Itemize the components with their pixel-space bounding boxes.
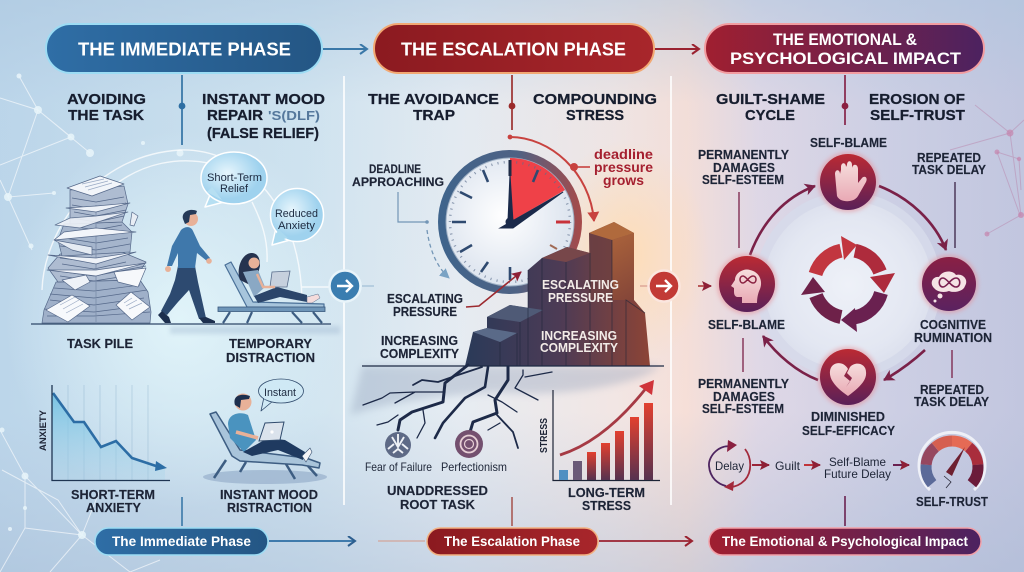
- label: cognitive rumination: [914, 318, 992, 345]
- divider: column three: [842, 75, 848, 125]
- label: unaddressed root task: ROOT TASK: [400, 498, 475, 512]
- icon: clock: [438, 150, 582, 294]
- heading: instant mood repair: (FALSE RELIEF): [207, 125, 319, 142]
- label: short-term anxiety: ANXIETY: [86, 501, 142, 515]
- label: short-term anxiety: [71, 488, 155, 515]
- label: self-trust: SELF-TRUST: [916, 495, 988, 509]
- heading: guilt-shame cycle: GUILT-SHAME: [716, 91, 825, 108]
- label: perfectionism: Perfectionism: [441, 460, 507, 474]
- label: self-blame future delay: Self-Blame: [829, 455, 886, 469]
- label: escalating pressure: PRESSURE: [393, 305, 457, 319]
- bubble: short-term relief: Short-Term: [207, 172, 262, 184]
- bubble: instant: Instant: [264, 387, 296, 399]
- label: diminished self-efficacy: [802, 410, 896, 438]
- label: permanently damages self-esteem bottom: PERMANENTLY: [698, 377, 790, 391]
- footer pill: the emotional and psychological impact: [709, 496, 981, 555]
- label: temporary distraction: [226, 337, 315, 365]
- label: diminished self-efficacy: SELF-EFFICACY: [802, 424, 896, 438]
- bubble: short-term relief: Relief: [220, 183, 249, 195]
- arrow: footer two to three: [599, 540, 692, 542]
- cycle node: self-blame hand: [818, 152, 878, 212]
- chart: long-term stress: [538, 380, 660, 480]
- arrow: phase two to phase three: [640, 270, 711, 302]
- heading: the avoidance trap: TRAP: [413, 107, 455, 124]
- heading: erosion of self-trust: EROSION OF: [869, 91, 965, 108]
- arrow: delay to guilt: [752, 464, 769, 466]
- label: escalating pressure and increasing complexity on rocks: INCREASING: [541, 329, 617, 343]
- label: long-term stress: LONG-TERM: [568, 486, 645, 500]
- flow: delay loop: [709, 440, 750, 491]
- label: deadline approaching: [352, 164, 444, 189]
- bubble: reduced anxiety: [270, 188, 324, 245]
- icon: woman on lounger with laptop: [218, 253, 325, 323]
- header pill: the emotional and psychological impact: PSYCHOLOGICAL IMPACT: [730, 50, 961, 68]
- label: self-blame left: SELF-BLAME: [708, 318, 785, 332]
- icon: fear of failure: [385, 432, 411, 458]
- label: permanently damages self-esteem top: [698, 148, 790, 248]
- label: cognitive rumination: RUMINATION: [914, 331, 992, 345]
- label: permanently damages self-esteem bottom: [698, 338, 790, 416]
- label: instant mood ristraction: [220, 488, 318, 515]
- footer pill: the escalation phase: [378, 497, 598, 555]
- bubble: reduced anxiety: Anxiety: [278, 220, 316, 232]
- header pill: the emotional and psychological impact: [705, 24, 984, 73]
- cycle arcs between nodes: [750, 186, 946, 380]
- cycle: background disc: [760, 197, 936, 373]
- header pill: the emotional and psychological impact: THE EMOTIONAL &: [773, 31, 917, 49]
- header pill: the immediate phase: [46, 24, 322, 73]
- heading: avoiding the task: [67, 91, 146, 124]
- callout: deadline pressure grows: grows: [603, 172, 644, 188]
- heading: instant mood repair: INSTANT MOOD: [202, 91, 325, 108]
- chart: short-term anxiety: ANXIETY: [38, 409, 49, 451]
- icon: roots and cracks: [363, 365, 552, 448]
- label: permanently damages self-esteem top: PERMANENTLY: [698, 148, 790, 162]
- ground line: rock base: [362, 365, 664, 367]
- arrow: immediate to escalation: [323, 48, 367, 50]
- label: diminished self-efficacy: DIMINISHED: [811, 410, 885, 424]
- icon: man walking away: [158, 210, 215, 323]
- arrow: guilt to self-blame: [804, 464, 820, 466]
- label: escalating pressure: ESCALATING: [387, 292, 463, 306]
- heading: instant mood repair: 'S(DLF): [268, 108, 320, 123]
- cycle node: self-blame head: [717, 254, 777, 314]
- divider: column two: [509, 75, 515, 130]
- heading: avoiding the task: THE TASK: [68, 107, 144, 124]
- label: escalating pressure and increasing complexity on rocks: COMPLEXITY: [540, 341, 619, 355]
- header pill: the escalation phase: THE ESCALATION PHASE: [401, 40, 626, 60]
- label: repeated task delay bottom: TASK DELAY: [914, 395, 990, 409]
- arrow: future delay to self-trust: [893, 464, 909, 466]
- label: repeated task delay bottom: REPEATED: [920, 383, 984, 397]
- label: long-term stress: STRESS: [582, 499, 631, 513]
- cycle arrows: central loop: [801, 236, 895, 332]
- label: escalating pressure and increasing complexity on rocks: [540, 278, 619, 355]
- label: guilt: Guilt: [775, 459, 801, 473]
- arrow: phase one to phase two: [330, 270, 374, 302]
- label: self-blame future delay: Future Delay: [824, 467, 891, 481]
- arrow: escalation to impact: [655, 48, 699, 50]
- callout line: escalating pressure: [466, 272, 521, 307]
- heading: instant mood repair: REPAIR: [207, 107, 263, 124]
- label: deadline approaching: DEADLINE: [369, 164, 421, 176]
- heading: the avoidance trap: [368, 91, 499, 124]
- heading: compounding stress: STRESS: [566, 107, 624, 124]
- label: permanently damages self-esteem bottom: SELF-ESTEEM: [702, 402, 784, 416]
- label: increasing complexity: [380, 334, 460, 361]
- label: instant mood ristraction: INSTANT MOOD: [220, 488, 318, 502]
- flow: delay loop: Delay: [715, 459, 744, 473]
- heading: compounding stress: [533, 91, 657, 124]
- heading: guilt-shame cycle: [716, 91, 825, 124]
- chart: short-term anxiety: [38, 385, 170, 480]
- cycle node: diminished self-efficacy: [818, 347, 878, 407]
- label: permanently damages self-esteem top: DAMAGES: [713, 161, 775, 175]
- label: short-term anxiety: SHORT-TERM: [71, 488, 155, 502]
- heading: erosion of self-trust: SELF-TRUST: [870, 107, 965, 124]
- label: deadline approaching: APPROACHING: [352, 177, 444, 189]
- label: self-blame future delay: [824, 455, 891, 481]
- label: increasing complexity: INCREASING: [381, 334, 458, 348]
- callout: deadline pressure grows: pressure: [594, 159, 653, 175]
- footer pill: the escalation phase: The Escalation Phase: [444, 533, 580, 549]
- callout: deadline pressure grows: deadline: [594, 146, 653, 162]
- icon: man relaxing with laptop: [203, 394, 327, 484]
- heading: the avoidance trap: THE AVOIDANCE: [368, 91, 499, 108]
- label: temporary distraction: DISTRACTION: [226, 351, 315, 365]
- bubble: reduced anxiety: Reduced: [275, 208, 318, 220]
- label: escalating pressure and increasing complexity on rocks: ESCALATING: [542, 278, 619, 292]
- header pill: the immediate phase: THE IMMEDIATE PHASE: [78, 40, 291, 60]
- label: permanently damages self-esteem bottom: DAMAGES: [713, 390, 775, 404]
- icon: task pile of papers: [42, 176, 151, 323]
- label: fear of failure: Fear of Failure: [365, 460, 432, 474]
- icon: rock pile: [465, 222, 650, 366]
- label: escalating pressure and increasing complexity on rocks: PRESSURE: [548, 291, 613, 305]
- label: task pile: TASK PILE: [67, 337, 133, 351]
- label: instant mood ristraction: RISTRACTION: [227, 501, 312, 515]
- label: long-term stress: [568, 486, 645, 513]
- bubble: instant: [258, 379, 304, 411]
- footer pill: the immediate phase: [95, 497, 268, 555]
- divider: column one: [179, 75, 185, 145]
- label: self-blame top: SELF-BLAME: [810, 136, 887, 150]
- footer pill: the immediate phase: The Immediate Phase: [112, 533, 251, 549]
- label: repeated task delay top: REPEATED: [917, 151, 981, 165]
- label: temporary distraction: TEMPORARY: [229, 337, 313, 351]
- callout: deadline pressure grows: [508, 135, 653, 221]
- bubble: short-term relief: [201, 152, 267, 207]
- header pill: the escalation phase: [374, 24, 654, 73]
- heading: avoiding the task: AVOIDING: [67, 91, 146, 108]
- footer pill: the emotional and psychological impact: The Emotional & Psychological Impact: [722, 533, 968, 549]
- label: escalating pressure: [387, 292, 463, 319]
- icon: perfectionism: [455, 430, 483, 458]
- label: repeated task delay bottom: [914, 350, 990, 409]
- chart: long-term stress: STRESS: [538, 418, 550, 453]
- label: unaddressed root task: UNADDRESSED: [387, 484, 488, 498]
- cycle node: cognitive rumination: [920, 255, 978, 313]
- label: cognitive rumination: COGNITIVE: [920, 318, 986, 332]
- heading: guilt-shame cycle: CYCLE: [745, 107, 795, 124]
- label: increasing complexity: COMPLEXITY: [380, 347, 460, 361]
- heading: instant mood repair: [202, 91, 325, 142]
- label: permanently damages self-esteem top: SELF-ESTEEM: [702, 173, 784, 187]
- label: unaddressed root task: [387, 484, 488, 512]
- heading: compounding stress: COMPOUNDING: [533, 91, 657, 108]
- gauge: self-trust: [919, 432, 985, 490]
- label: repeated task delay top: [912, 151, 987, 248]
- callout line: deadline to clock: [398, 192, 449, 278]
- label: repeated task delay top: TASK DELAY: [912, 163, 987, 177]
- ground line: [31, 323, 331, 325]
- arrow: footer one to two: [269, 540, 355, 542]
- heading: erosion of self-trust: [869, 91, 965, 124]
